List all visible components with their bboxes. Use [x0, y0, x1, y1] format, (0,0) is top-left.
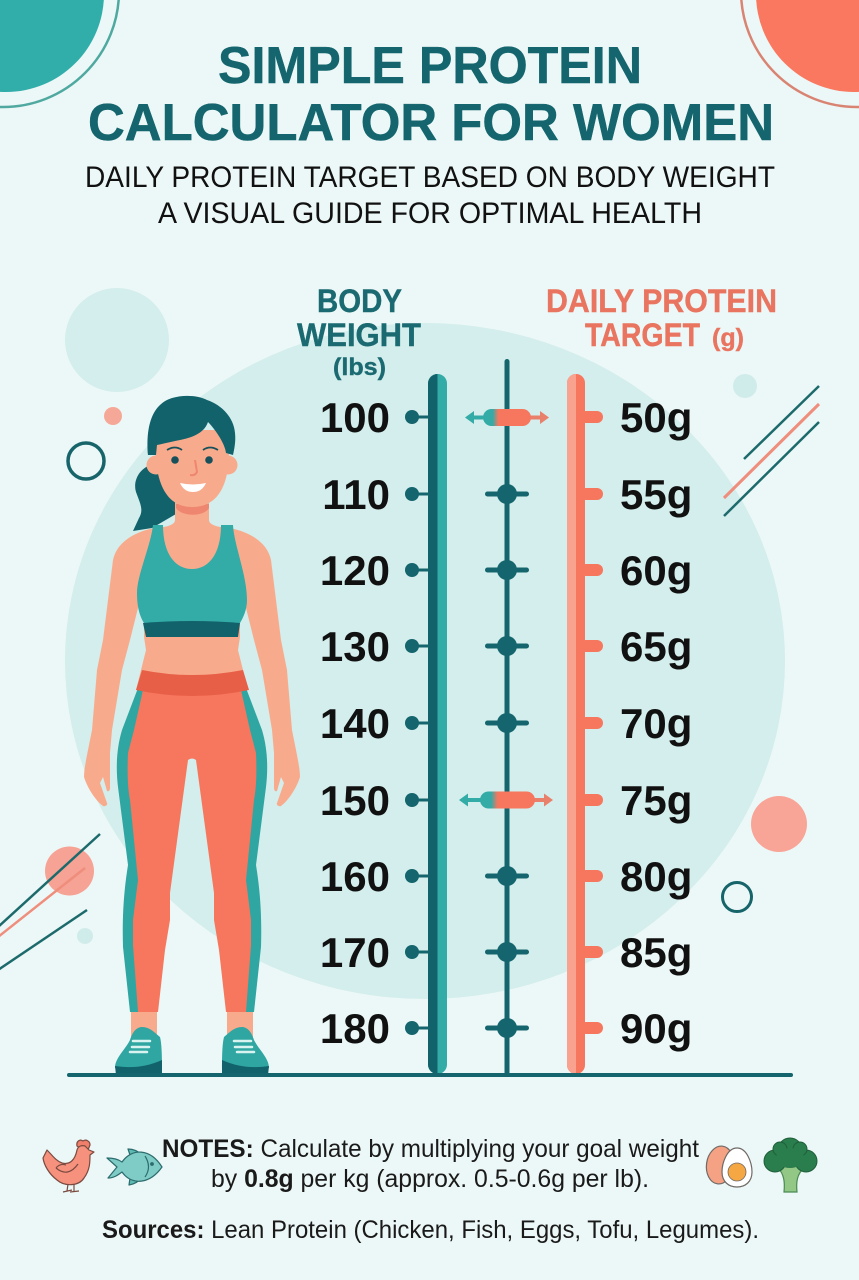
- title: CALCULATOR FOR WOMEN: [88, 94, 774, 152]
- row: 170 lbs to 85g: 85g: [620, 929, 692, 976]
- left arm: [84, 528, 154, 806]
- row: 110 lbs to 55g: 55g: [620, 471, 692, 518]
- central scale axis: [504, 359, 510, 1075]
- sports top: [137, 525, 247, 623]
- icon: broccoli: [764, 1138, 817, 1192]
- column heading: daily protein target: TARGET: [585, 317, 700, 353]
- column heading: body weight: WEIGHT: [297, 317, 421, 353]
- ponytail: [133, 465, 176, 531]
- row: 140 lbs to 70g: 70g: [620, 700, 692, 747]
- decoration: right shapes: [722, 374, 819, 912]
- notes text: by 0.8g per kg (approx. 0.5-0.6g per lb).: [211, 1165, 649, 1193]
- row: 120 lbs to 60g: 60g: [620, 547, 692, 594]
- subtitle: A VISUAL GUIDE FOR OPTIMAL HEALTH: [158, 197, 702, 230]
- protein target bar: [567, 374, 585, 1074]
- row: 110 lbs to 55g: 110: [322, 471, 390, 518]
- row: 130 lbs to 65g: 130: [320, 623, 390, 670]
- collar shadow: [176, 504, 209, 515]
- column heading: body weight: [297, 283, 421, 381]
- right legging stripe: [239, 688, 267, 1012]
- row: 110 lbs to 55g: [322, 471, 692, 518]
- smile: [180, 483, 206, 492]
- column heading: body weight: BODY: [317, 283, 402, 319]
- icon: eggs: [704, 1144, 752, 1187]
- row: 150 lbs to 75g, highlighted: 150: [320, 777, 390, 824]
- row: 130 lbs to 65g: [320, 623, 692, 670]
- row: 180 lbs to 90g: [320, 1005, 692, 1052]
- row: 170 lbs to 85g: 170: [320, 929, 390, 976]
- notes text: [162, 1135, 699, 1193]
- waistband: [136, 670, 249, 696]
- row: 130 lbs to 65g: 65g: [620, 623, 692, 670]
- right shoe: [222, 1027, 269, 1075]
- row: 100 lbs to 50g, highlighted: 100: [320, 394, 390, 441]
- row: 140 lbs to 70g: [320, 700, 692, 747]
- row: 170 lbs to 85g: [320, 929, 692, 976]
- row: 140 lbs to 70g: 140: [320, 700, 390, 747]
- icon: fish: [107, 1149, 162, 1185]
- row: 100 lbs to 50g, highlighted: [320, 394, 692, 441]
- title: SIMPLE PROTEIN: [218, 37, 642, 95]
- row: 160 lbs to 80g: 160: [320, 853, 390, 900]
- body weight bar: [428, 374, 447, 1074]
- row: 160 lbs to 80g: 80g: [620, 853, 692, 900]
- sources text: Sources: Lean Protein (Chicken, Fish, Eggs, Tofu, Legumes).: [102, 1216, 759, 1244]
- eyes and brows: [167, 448, 218, 464]
- decoration: top-left teal circle: [0, 0, 119, 107]
- row: 180 lbs to 90g: 90g: [620, 1005, 692, 1052]
- decoration: left shapes: [65, 288, 169, 479]
- row: 100 lbs to 50g, highlighted: 50g: [620, 394, 692, 441]
- column heading: daily protein target: [546, 283, 777, 353]
- subtitle: DAILY PROTEIN TARGET BASED ON BODY WEIGHT: [85, 161, 775, 194]
- column heading: daily protein target: (g): [712, 324, 744, 352]
- skin: neck and torso: [136, 495, 248, 690]
- row: 180 lbs to 90g: 180: [320, 1005, 390, 1052]
- row: 150 lbs to 75g, highlighted: [320, 777, 692, 824]
- figure: woman in sportswear: [84, 396, 300, 1075]
- title: [88, 37, 774, 152]
- leggings main: [128, 690, 256, 1012]
- right arm: [230, 528, 300, 806]
- column heading: body weight: (lbs): [333, 354, 386, 381]
- decoration: top-right coral circle: [741, 0, 859, 107]
- row: 120 lbs to 60g: [320, 547, 692, 594]
- notes text: NOTES: Calculate by multiplying your goal weight: [162, 1135, 699, 1163]
- left legging stripe: [117, 688, 145, 1012]
- subtitle: [85, 161, 775, 230]
- top band: [143, 621, 240, 637]
- face: [146, 430, 238, 507]
- column heading: daily protein target: DAILY PROTEIN: [546, 283, 777, 319]
- hair: [148, 396, 235, 455]
- decoration: lower-left shapes: [0, 834, 100, 970]
- nose: [190, 460, 197, 475]
- row: 150 lbs to 75g, highlighted: 75g: [620, 777, 692, 824]
- ground line: [67, 1073, 793, 1077]
- icon: chicken: [43, 1140, 94, 1192]
- left shoe: [115, 1027, 162, 1075]
- ankles: [131, 1005, 253, 1037]
- row: 120 lbs to 60g: 120: [320, 547, 390, 594]
- row: 160 lbs to 80g: [320, 853, 692, 900]
